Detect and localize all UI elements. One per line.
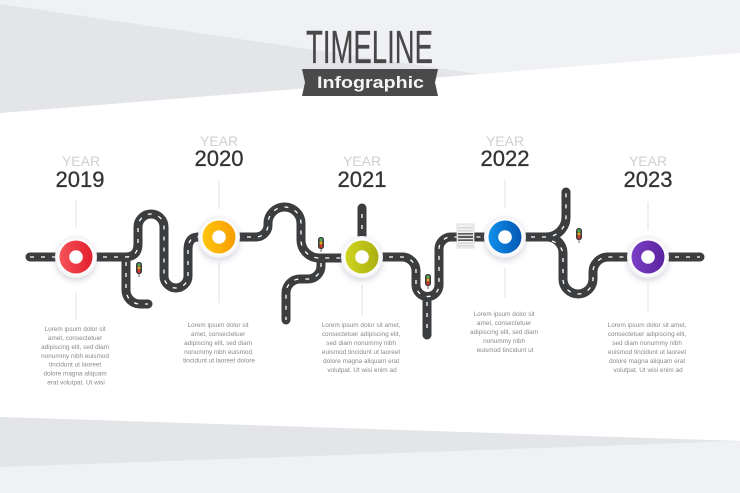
marker 2021 bbox=[341, 236, 383, 278]
icon: crosswalk bbox=[457, 224, 474, 248]
milestone 2020 bbox=[183, 133, 255, 364]
description 2023: euismod tincidunt ut laoreet bbox=[608, 349, 686, 356]
description 2020: tincidunt ut laoreet dolore bbox=[183, 358, 255, 364]
year number 2021: 2021 bbox=[338, 167, 386, 192]
bottom background band bbox=[0, 417, 740, 493]
description 2021: Lorem ipsum dolor sit amet, bbox=[322, 322, 401, 329]
description 2022: nonummy nibh bbox=[483, 338, 526, 345]
year number 2022: 2022 bbox=[481, 146, 529, 171]
description 2020: Lorem ipsum dolor sit bbox=[188, 322, 249, 329]
subtitle banner bbox=[302, 69, 438, 96]
marker 2022 bbox=[484, 216, 526, 258]
winding road bbox=[30, 192, 700, 335]
description 2021: volutpat. Ut wisi enim ad bbox=[327, 367, 397, 374]
description 2022: euismod tincidunt ut bbox=[477, 347, 534, 354]
description 2022: Lorem ipsum dolor sit bbox=[474, 311, 535, 318]
description 2021: consectetuer adipiscing elit, bbox=[322, 331, 401, 338]
description 2022: amet, consectetuer bbox=[477, 320, 532, 327]
milestone 2023 bbox=[608, 153, 688, 374]
subtitle banner: Infographic bbox=[317, 73, 424, 92]
year label 2020: YEAR bbox=[200, 133, 238, 149]
description 2019: tincidunt ut laoreet bbox=[49, 362, 101, 368]
milestone 2022 bbox=[470, 133, 540, 354]
milestone 2021 bbox=[322, 153, 402, 374]
description 2023: sed diam nonummy nibh bbox=[612, 340, 682, 347]
description 2021: sed diam nonummy nibh bbox=[326, 340, 396, 347]
year number 2023: 2023 bbox=[624, 167, 672, 192]
description 2019: nonummy nibh euismod bbox=[41, 353, 109, 360]
description 2019: Lorem ipsum dolor sit bbox=[45, 326, 106, 333]
year label 2023: YEAR bbox=[629, 153, 667, 169]
description 2023: Lorem ipsum dolor sit amet, bbox=[608, 322, 687, 329]
description 2019: dolore magna aliquam bbox=[43, 370, 107, 378]
top background band bbox=[0, 0, 740, 113]
description 2023: consectetuer adipiscing elit, bbox=[608, 331, 687, 338]
description 2021: dolore magna aliquam erat bbox=[323, 358, 399, 365]
description 2022: adipiscing elit, sed diam bbox=[470, 329, 538, 336]
year label 2019: YEAR bbox=[62, 153, 100, 169]
marker 2023 bbox=[627, 236, 669, 278]
description 2023: dolore magna aliquam erat bbox=[609, 358, 685, 365]
year number 2020: 2020 bbox=[195, 146, 243, 171]
description 2019: erat volutpat. Ut wisi bbox=[47, 380, 105, 386]
description 2020: amet, consectetuer bbox=[191, 331, 246, 338]
icon: traffic light 4 bbox=[576, 228, 582, 243]
icon: traffic light 1 bbox=[136, 262, 142, 277]
icon: traffic light 3 bbox=[425, 274, 431, 289]
year label 2021: YEAR bbox=[343, 153, 381, 169]
description 2019: amet, consectetuer bbox=[48, 335, 103, 342]
description 2020: nonummy nibh euismod bbox=[184, 349, 252, 356]
milestone 2019 bbox=[41, 153, 111, 386]
year number 2019: 2019 bbox=[56, 167, 104, 192]
description 2023: volutpat. Ut wisi enim ad bbox=[613, 367, 683, 374]
marker 2019 bbox=[55, 236, 97, 278]
icon: traffic light 2 bbox=[318, 237, 324, 252]
description 2020: adipiscing elit, sed diam bbox=[184, 340, 252, 347]
title: TIMELINE bbox=[306, 21, 433, 73]
year label 2022: YEAR bbox=[486, 133, 524, 149]
description 2021: euismod tincidunt ut laoreet bbox=[322, 349, 400, 356]
marker 2020 bbox=[198, 216, 240, 258]
description 2019: adipiscing elit, sed diam bbox=[41, 344, 109, 351]
